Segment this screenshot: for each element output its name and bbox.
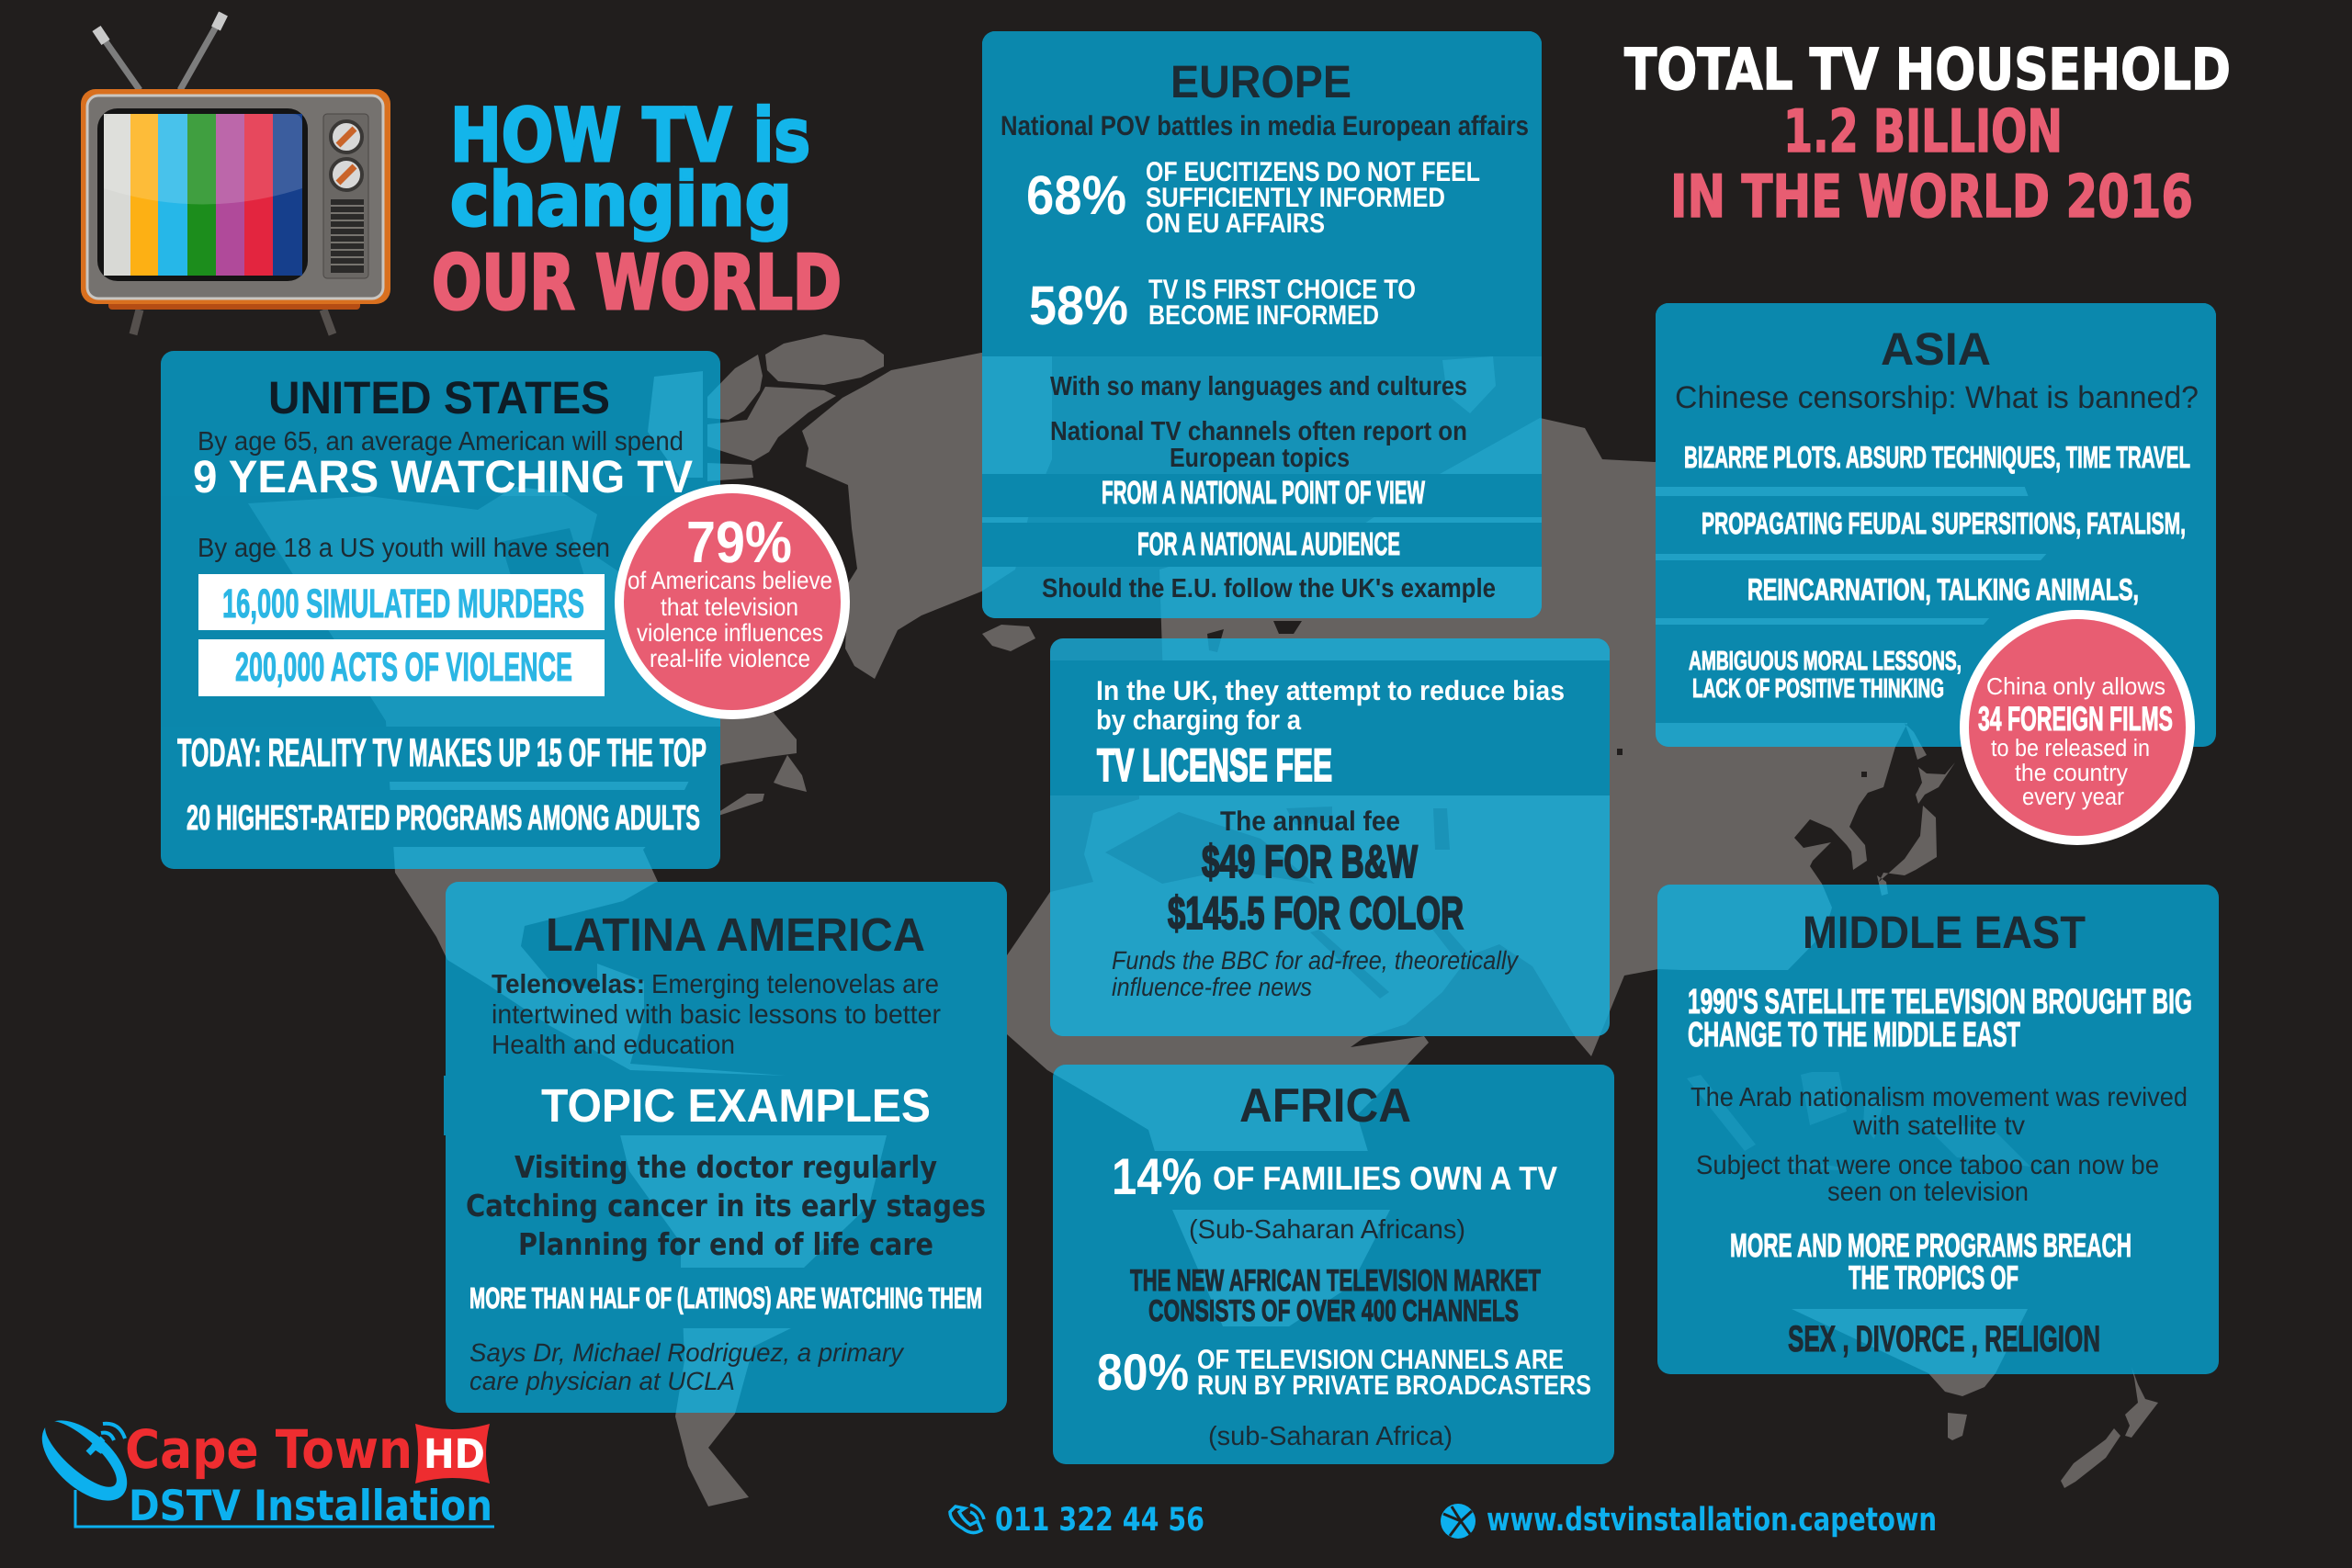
headline: total tv household bbox=[1624, 36, 2231, 231]
callout: 79%: 79% bbox=[686, 509, 792, 575]
stat: 14%: 14% bbox=[1112, 1147, 1202, 1205]
icon: phone bbox=[950, 1505, 984, 1533]
stat: 80% bbox=[1097, 1343, 1591, 1451]
panel: united states bbox=[161, 351, 850, 869]
text: national point of view bbox=[1102, 475, 1425, 562]
text: languages and national channels bbox=[1050, 372, 1467, 473]
heading: tv license fee: TV LICENSE FEE bbox=[1097, 739, 1332, 791]
text: telenovelas: Health and education bbox=[492, 1031, 735, 1060]
list: banned topics bbox=[1684, 440, 2190, 704]
text: arab nationalism: seen on television bbox=[1827, 1178, 2029, 1207]
text: national point of view: FROM A NATIONAL POINT OF VIEW bbox=[1102, 475, 1425, 511]
text: programs breach: THE TROPICS OF bbox=[1849, 1258, 2018, 1296]
list: banned topics: REINCARNATION, TALKING ANIMALS, bbox=[1747, 572, 2139, 606]
stat: 9 years watching tv: 9 YEARS WATCHING TV bbox=[193, 451, 694, 502]
text: annual fee bbox=[1168, 807, 1464, 939]
text: reality tv: 20 HIGHEST-RATED PROGRAMS AMONG ADULTS bbox=[187, 799, 700, 838]
text: reality tv bbox=[177, 731, 707, 838]
contact: website: www.dstvinstallation.capetown bbox=[1487, 1502, 1937, 1539]
heading: asia: ASIA bbox=[1881, 323, 1991, 375]
text: arab nationalism: with satellite tv bbox=[1852, 1111, 2025, 1141]
panel: uk license fee bbox=[1050, 638, 1610, 1036]
stat: 68%: SUFFICIENTLY INFORMED bbox=[1146, 183, 1445, 213]
panel: asia bbox=[1656, 303, 2216, 845]
logo: cape town hd dstv installation: Cape Town bbox=[125, 1418, 413, 1481]
list: banned topics: AMBIGUOUS MORAL LESSONS, bbox=[1689, 647, 1962, 676]
text: african television market bbox=[1130, 1263, 1541, 1327]
world map background bbox=[248, 334, 2158, 1506]
text: annual fee: $145.5 FOR COLOR bbox=[1168, 887, 1464, 939]
panel: middle east bbox=[1657, 885, 2219, 1374]
badge: hd: HD bbox=[424, 1431, 485, 1478]
stat: 80%: 80% bbox=[1097, 1343, 1189, 1401]
text: uk bias bbox=[1096, 676, 1565, 736]
stat: 58% bbox=[1029, 275, 1416, 336]
title: how tv is changing our world: changing bbox=[450, 157, 792, 243]
badge: hd bbox=[415, 1424, 490, 1483]
title: how tv is changing our world bbox=[432, 93, 842, 327]
stat: 58%: BECOME INFORMED bbox=[1148, 300, 1379, 331]
text: telenovelas: intertwined with basic lessons to better bbox=[492, 1000, 941, 1030]
quote: dr rodriguez: care physician at UCLA bbox=[469, 1367, 735, 1395]
heading: latina america: LATINA AMERICA bbox=[546, 908, 925, 961]
quote: dr rodriguez bbox=[469, 1338, 905, 1395]
callout: 79%: of Americans believe bbox=[628, 567, 832, 594]
heading: united states: UNITED STATES bbox=[268, 372, 610, 423]
note: funds the bbc: influence-free news bbox=[1112, 973, 1312, 1001]
text: by age 18: By age 18 a US youth will have seen bbox=[198, 534, 610, 563]
stat: 80%: (sub-Saharan Africa) bbox=[1208, 1422, 1453, 1451]
callout: 79% bbox=[615, 484, 850, 719]
callout: 34 foreign films bbox=[1960, 610, 2195, 845]
stat: 14%: (Sub-Saharan Africans) bbox=[1189, 1215, 1465, 1245]
text: more than half: MORE THAN HALF OF (LATINOS) ARE WATCHING THEM bbox=[469, 1281, 982, 1314]
text: programs breach bbox=[1730, 1226, 2132, 1296]
stat: 58%: TV IS FIRST CHOICE TO bbox=[1148, 275, 1416, 305]
text: uk bias: by charging for a bbox=[1096, 705, 1301, 736]
headline: total tv household: 1.2 BILLION bbox=[1783, 98, 2063, 166]
stat box: acts of violence bbox=[198, 639, 605, 696]
text: national point of view: FOR A NATIONAL AUDIENCE bbox=[1137, 526, 1400, 562]
heading: africa: AFRICA bbox=[1239, 1079, 1411, 1133]
heading: topic examples: TOPIC EXAMPLES bbox=[541, 1079, 931, 1132]
note: funds the bbc: Funds the BBC for ad-free, theoretically bbox=[1112, 946, 1520, 975]
title: how tv is changing our world: OUR WORLD bbox=[432, 240, 842, 327]
headline: total tv household: IN THE WORLD 2016 bbox=[1670, 164, 2193, 231]
stat: 68%: 68% bbox=[1026, 164, 1126, 226]
text: african television market: CONSISTS OF OVER 400 CHANNELS bbox=[1148, 1293, 1519, 1327]
text: telenovelas: Telenovelas: bbox=[492, 970, 645, 999]
heading: middle east: MIDDLE EAST bbox=[1803, 907, 2086, 958]
text: annual fee: The annual fee bbox=[1220, 807, 1400, 837]
list: topics: Visiting the doctor regularly bbox=[514, 1149, 937, 1185]
stat: 58%: 58% bbox=[1029, 275, 1128, 336]
stat: 14% bbox=[1112, 1147, 1557, 1245]
stat: 68%: OF EUCITIZENS DO NOT FEEL bbox=[1146, 157, 1480, 187]
icon: satellite dish bbox=[28, 1405, 494, 1527]
text: sex divorce religion: SEX , DIVORCE , RELIGION bbox=[1788, 1319, 2100, 1359]
text: reality tv: TODAY: REALITY TV MAKES UP 15 OF THE TOP bbox=[177, 731, 707, 775]
subheading: national pov: National POV battles in media European affairs bbox=[1001, 111, 1529, 141]
list: topics: Planning for end of life care bbox=[518, 1226, 933, 1262]
list: topics bbox=[466, 1149, 986, 1262]
headline: total tv household: TOTAL TV HOUSEHOLD bbox=[1624, 36, 2231, 103]
callout: 79%: real-life violence bbox=[650, 645, 810, 672]
stat box: simulated murders: 16,000 SIMULATED MURDERS bbox=[222, 581, 584, 626]
text: satellite television bbox=[1688, 983, 2192, 1055]
icon: globe bbox=[1441, 1504, 1476, 1539]
callout: 79%: that television bbox=[661, 593, 798, 621]
icon: retro television bbox=[81, 14, 390, 334]
text: telenovelas: Emerging telenovelas are bbox=[651, 970, 939, 999]
stat box: acts of violence: 200,000 ACTS OF VIOLENCE bbox=[235, 645, 572, 690]
subheading: chinese censorship: Chinese censorship: What is banned? bbox=[1675, 380, 2199, 415]
text: african television market: THE NEW AFRICAN TELEVISION MARKET bbox=[1130, 1263, 1541, 1297]
stat: 80%: OF TELEVISION CHANNELS ARE bbox=[1197, 1345, 1564, 1375]
panel: africa bbox=[1053, 1065, 1614, 1464]
title: how tv is changing our world: HOW TV is bbox=[450, 93, 810, 178]
text: uk bias: In the UK, they attempt to reduce bias bbox=[1096, 676, 1565, 706]
callout: 79%: violence influences bbox=[637, 619, 823, 647]
text: uk example question: Should the E.U. follow the UK's example bbox=[1042, 574, 1496, 604]
text: languages and national channels: European topics bbox=[1170, 444, 1350, 473]
text: arab nationalism: The Arab nationalism movement was revived bbox=[1690, 1083, 2188, 1112]
stat: 80%: RUN BY PRIVATE BROADCASTERS bbox=[1197, 1371, 1591, 1401]
text: languages and national channels: With so many languages and cultures bbox=[1050, 372, 1467, 401]
text: by age 65: By age 65, an average American will spend bbox=[198, 427, 684, 457]
logo: cape town hd dstv installation bbox=[28, 1405, 494, 1530]
panel: europe bbox=[982, 31, 1542, 618]
stat: 68% bbox=[1026, 157, 1480, 239]
stat: 14%: OF FAMILIES OWN A TV bbox=[1213, 1159, 1557, 1197]
text: arab nationalism: Subject that were once taboo can now be bbox=[1696, 1151, 2159, 1180]
panel: latin america bbox=[444, 882, 1007, 1413]
callout: 34 foreign films: China only allows bbox=[1986, 672, 2165, 700]
contact: phone: 011 322 44 56 bbox=[995, 1502, 1204, 1539]
text: languages and national channels: National TV channels often report on bbox=[1050, 417, 1467, 446]
note: funds the bbc bbox=[1112, 946, 1520, 1001]
logo: cape town hd dstv installation: DSTV Installation bbox=[129, 1481, 492, 1530]
text: telenovelas bbox=[492, 970, 941, 1060]
text: satellite television: CHANGE TO THE MIDDLE EAST bbox=[1688, 1016, 2020, 1055]
list: banned topics: LACK OF POSITIVE THINKING bbox=[1692, 674, 1944, 704]
callout: 34 foreign films: the country bbox=[2015, 759, 2128, 786]
contact: phone bbox=[950, 1502, 1204, 1539]
stat box: simulated murders bbox=[198, 574, 605, 630]
heading: europe: EUROPE bbox=[1170, 56, 1351, 107]
callout: 34 foreign films: every year bbox=[2022, 783, 2124, 810]
list: topics: Catching cancer in its early stages bbox=[466, 1188, 986, 1224]
text: annual fee: $49 FOR B&W bbox=[1202, 836, 1419, 887]
callout: 34 foreign films: to be released in bbox=[1991, 734, 2150, 761]
quote: dr rodriguez: Says Dr, Michael Rodriguez, a primary bbox=[469, 1338, 905, 1367]
stat: 68%: ON EU AFFAIRS bbox=[1146, 209, 1325, 239]
callout: 34 foreign films: 34 FOREIGN FILMS bbox=[1978, 700, 2173, 738]
text: arab nationalism bbox=[1690, 1083, 2188, 1207]
